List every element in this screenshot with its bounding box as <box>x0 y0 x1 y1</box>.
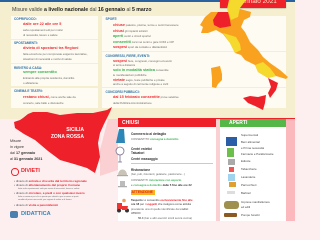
list: aperti: Beni alimentari <box>241 140 260 144</box>
list: aperti: Lavanderie <box>241 175 255 179</box>
panel: chiusi: 56.3 (bar e altri esercizi simili senza cucina) <box>138 216 192 220</box>
panel: congressi, fiere, eventi: anche a seguito di cerimonie religiose e civili <box>113 82 168 86</box>
panel: chiusi: ATECO <box>131 210 141 214</box>
panel: congressi, fiere, eventi: le manifestazioni pubbliche <box>113 72 147 76</box>
panel: cinema e teatri: CINEMA E TEATRI: <box>14 88 43 92</box>
panel: congressi, fiere, eventi: solo in modalità statica consentite <box>113 68 169 72</box>
icon: scissors <box>227 191 235 194</box>
panel: spostamenti: divieto di spostarsi tra Regioni <box>23 46 78 50</box>
icon: no sign <box>11 168 18 176</box>
panel: coprifuoco: dalle ore 22 alle ore 5 <box>23 22 61 26</box>
panel: sport <box>102 16 286 51</box>
region: yellow Trentino <box>227 0 246 20</box>
panel: chiusi: Tasporto: è consentito esclusivamente fino alle <box>131 198 193 202</box>
pink wedge <box>100 119 118 176</box>
panel: coprifuoco: di necessità, lavoro e salute <box>23 32 58 36</box>
panel: cinema e teatri: concerto, sale ballo e discoteche <box>23 100 64 104</box>
panel: chiusi: (bar, pub, ristoranti, gelaterie, pasticcerie...) <box>131 172 185 176</box>
panel: coprifuoco: COPRIFUOCO: <box>14 16 37 20</box>
icon: newspaper <box>228 159 235 165</box>
list: divieti: • divieto di allontanamento dal proprio Comune <box>14 182 80 186</box>
icon: hair dryer <box>229 182 236 187</box>
title: Sicilia zona rossa: SICILIA <box>66 126 84 132</box>
icon: cloche <box>117 170 128 176</box>
list: divieti: fatta eccezione per chi si sposta per attività o per accesso ai punti <box>18 196 79 198</box>
list: aperti: Edicole <box>241 159 250 163</box>
panel: sport: sospesi sport da contatto e dilettantistici <box>113 44 167 48</box>
subtitle: Misure valide a livello nazionale dal 16 gennaio al 5 marzo <box>12 6 152 12</box>
text: validity: in vigore <box>10 145 24 149</box>
list: aperti: e Prima necessità <box>241 146 264 150</box>
title: Sicilia zona rossa <box>51 126 84 140</box>
panel: cinema e teatri <box>11 88 98 108</box>
panel: rientro a casa: o abitazione. <box>23 80 39 84</box>
icon: large Sicily <box>14 107 112 173</box>
region: orange mainland <box>200 9 288 79</box>
list: aperti: Tabaccherie <box>241 167 257 171</box>
panel: sport: chiuse palestre, piscine, terme e centri benessere <box>113 22 179 26</box>
text: validity <box>10 138 42 161</box>
region: red Calabria <box>268 78 278 98</box>
list: divieti: • divieto di circolare, a piedi o con qualsiasi mezzo <box>14 190 85 194</box>
icon: tobacco <box>229 167 234 172</box>
panel: congressi, fiere, eventi: si terrà a distanza <box>113 63 135 67</box>
panel: congressi, fiere, eventi <box>102 52 286 87</box>
list: aperti: Barbieri <box>241 191 251 195</box>
icon: shop bag <box>116 129 125 143</box>
pink right edge <box>286 119 295 221</box>
list: divieti: • divieto di entrata e di uscita dal territorio regionale <box>14 178 87 182</box>
icon: factory tools <box>224 201 239 209</box>
icon: coffee cup <box>118 181 127 188</box>
cream background <box>0 2 295 119</box>
icon: delivery scooter <box>117 198 129 212</box>
list: aperti: Farmacie e Parafarmacie <box>241 152 273 156</box>
panel: chiusi: ore 18 per i soggetti che svolgono come attività <box>131 202 191 206</box>
region: red Sicily on map <box>243 95 266 110</box>
icon: shopping basket <box>226 137 237 146</box>
panel: concorsi pubblici <box>102 88 286 108</box>
region: yellow Toscana <box>223 33 241 53</box>
region: red Lombardia <box>213 12 231 28</box>
panel: chiusi: Ristorazione <box>131 168 150 172</box>
header bar <box>0 0 295 2</box>
list: divieti: vendita di prima necessità, per ragioni di salute o di lavoro <box>18 199 71 201</box>
panel: chiusi: CONSENTITO consegna a domicilio <box>131 136 179 140</box>
text: validity: al 31 gennaio 2021 <box>10 157 42 161</box>
panel: congressi, fiere, eventi: sospesi fiere, congressi, convegni ed eventi <box>113 58 172 62</box>
panel: sport: aperti centri e circoli sportivi <box>113 34 151 38</box>
list: aperti: Imprese manifatturiere <box>241 200 270 204</box>
heading: divieti: DIVIETI <box>21 168 40 174</box>
icon: didattica <box>10 211 18 218</box>
list: divieti: • divieto di visita a parenti/amici <box>14 202 58 206</box>
panel: spostamenti: situazioni di necessità e motivi di salute <box>23 56 72 60</box>
panel: concorsi pubblici: dal 15 febbraio consentite prove selettive <box>113 95 179 99</box>
pink column behind panels <box>216 119 220 221</box>
callout: attenzione <box>131 190 155 195</box>
heading: chiusi <box>118 119 216 127</box>
text: validity: Misure <box>10 138 21 142</box>
panel: spostamenti <box>11 40 98 63</box>
list: divieti <box>14 178 87 206</box>
panel: chiusi: e consegna a domicilio dalle 5 fino alle ore 22 <box>131 182 192 186</box>
icon: laundry <box>228 174 235 181</box>
panel: congressi, fiere, eventi: vietate sagre, feste pubbliche e private <box>113 78 165 82</box>
panel: spostamenti: fatta eccezione per comprovate esigenze lavorative, <box>23 52 88 56</box>
heading: didattica: DIDATTICA <box>21 211 51 217</box>
panel: concorsi pubblici: della Pubblica Amministrazione <box>113 101 152 105</box>
icon: mirror <box>116 146 124 162</box>
panel: spostamenti: SPOSTAMENTI: <box>14 40 38 44</box>
panel: sport: consentiti corsi nei centri e gare CONI e CIP <box>113 40 174 44</box>
list: divieti: fatta salvo spostamenti solo per motivi di necessità, lavoro e salute <box>18 188 79 190</box>
red band <box>118 118 295 119</box>
panel: chiusi: Centri estetici <box>131 146 152 150</box>
list: aperti: Parrucchieri <box>241 183 256 187</box>
panel: cinema e teatri: restano chiusi, come anche sale da <box>23 95 76 99</box>
text: validity: dal 17 gennaio <box>10 151 35 155</box>
panel: chiusi: prevalente una di quelle identificate dai codici <box>131 206 188 210</box>
panel: sport: SPORT: <box>106 16 117 20</box>
panel: rientro a casa: Entrando alla propria residenza, domicilio <box>23 76 74 80</box>
list: aperti <box>241 133 274 217</box>
panel: chiusi: Tatuatori <box>131 151 144 155</box>
panel: aperti <box>220 119 286 221</box>
callout: attenzione: ATTENZIONE <box>132 190 153 194</box>
heading: aperti: APERTI <box>229 120 247 126</box>
panel: coprifuoco <box>11 16 98 39</box>
list: aperti: Supermercati <box>241 133 258 137</box>
panel: sport: chiusi gli impianti sciistici <box>113 28 148 32</box>
list: aperti: ed edili <box>241 205 250 209</box>
heading: chiusi: CHIUSI <box>122 120 139 126</box>
list: aperti: Pompe funebri <box>241 213 260 217</box>
date badge <box>220 0 286 8</box>
region: orange Sardinia <box>211 66 222 88</box>
heading: aperti <box>220 119 286 127</box>
panel: concorsi pubblici: CONCORSI PUBBLICI: <box>106 90 140 94</box>
icon: coffin <box>224 213 237 217</box>
panel: rientro a casa: RIENTRO A CASA: <box>14 66 42 70</box>
panel: chiusi: CONSENTITI ristorazione con asporto <box>131 178 181 182</box>
panel: rientro a casa: sempre consentito <box>23 70 57 74</box>
icon: pharmacy <box>227 148 234 157</box>
panel: chiusi: Centri massaggio <box>131 156 158 160</box>
panel: rientro a casa <box>11 64 98 86</box>
panel: chiusi <box>118 119 216 221</box>
panel: congressi, fiere, eventi: CONGRESSI, FIERE, EVENTI: <box>106 54 150 58</box>
region: yellow Campania and Basilicata <box>255 62 276 78</box>
panel: chiusi: Commercio al dettaglio <box>131 132 166 136</box>
panel: coprifuoco: salvo spostamenti edi per motivi <box>23 28 63 32</box>
title: Sicilia zona rossa: ZONA ROSSA <box>51 134 84 140</box>
